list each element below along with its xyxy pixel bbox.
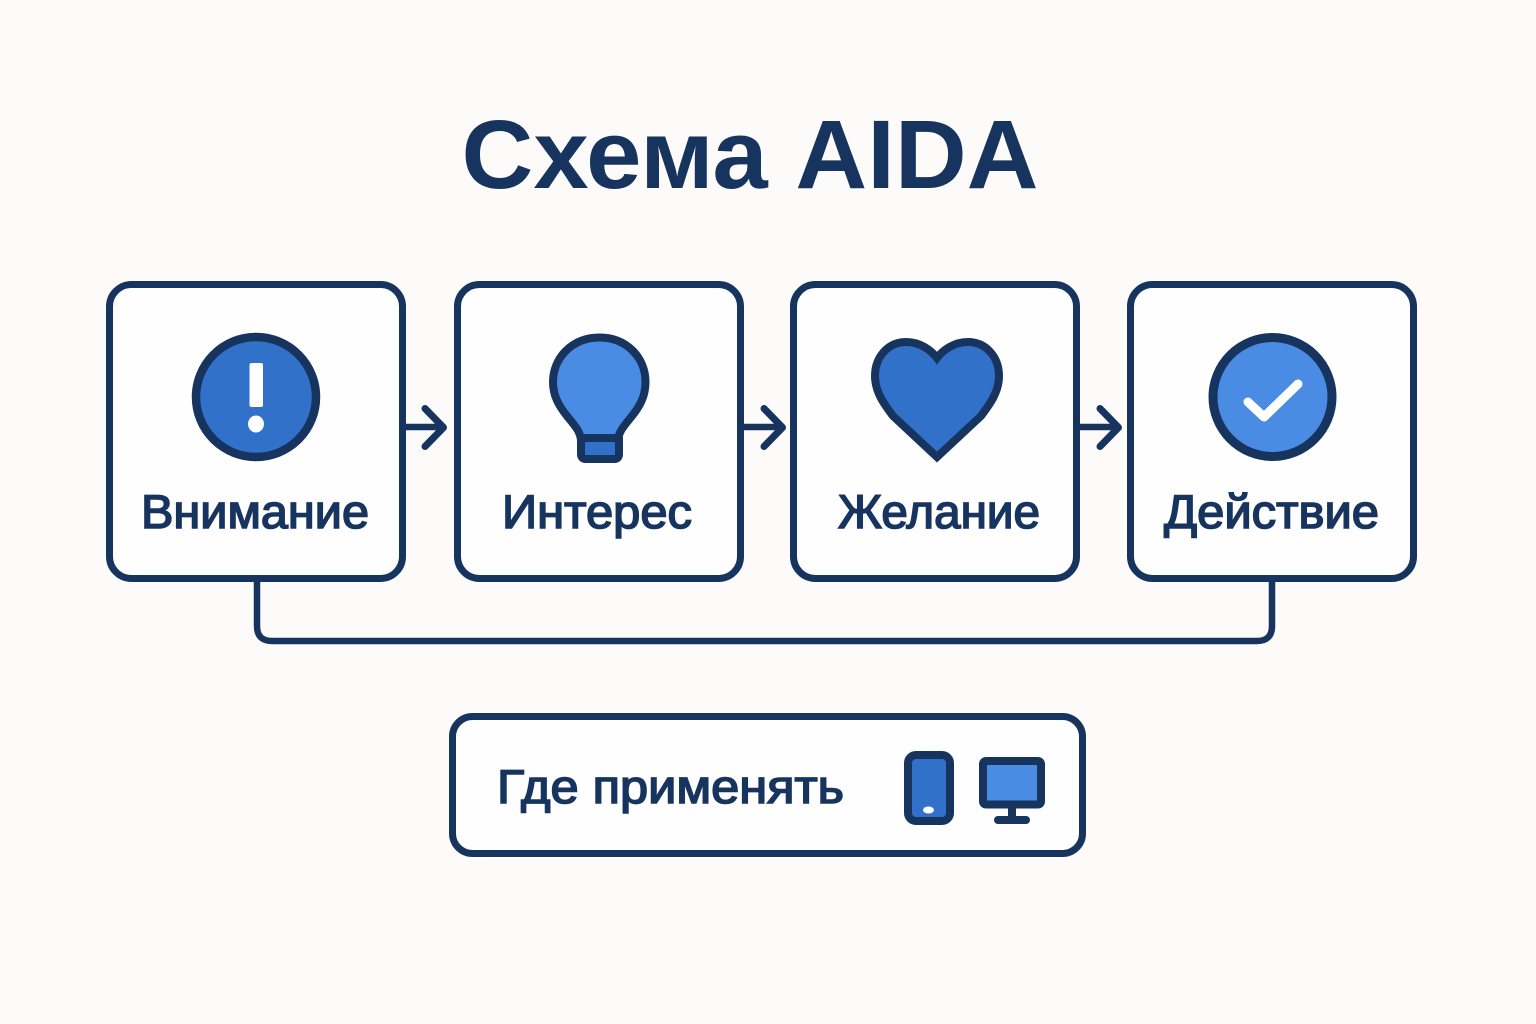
arrow: Желание to Действие [1079,408,1118,446]
icon: light bulb [553,338,646,459]
label: Интерес: Интерес [502,485,692,538]
label: Внимание: Внимание [141,485,369,538]
icon: heart [875,342,999,457]
icon: smartphone [908,755,950,821]
panel: Внимание [110,284,402,578]
panel: Желание [794,284,1076,578]
label: Желание: Желание [838,485,1040,538]
panel: Где применять [452,716,1082,854]
icon: check mark [1213,338,1332,456]
arrow: Внимание to Интерес [405,408,444,446]
icon: exclamation [196,337,316,457]
connector: feedback line from Внимание to Действие [257,580,1272,641]
label: Где применять: Где применять [497,760,844,813]
title: Схема AIDA [462,100,1038,209]
panel: Действие [1130,284,1414,578]
icon: desktop monitor [983,761,1041,824]
arrow: Интерес to Желание [743,408,782,446]
panel: Интерес [458,284,740,578]
label: Действие: Действие [1164,485,1379,538]
